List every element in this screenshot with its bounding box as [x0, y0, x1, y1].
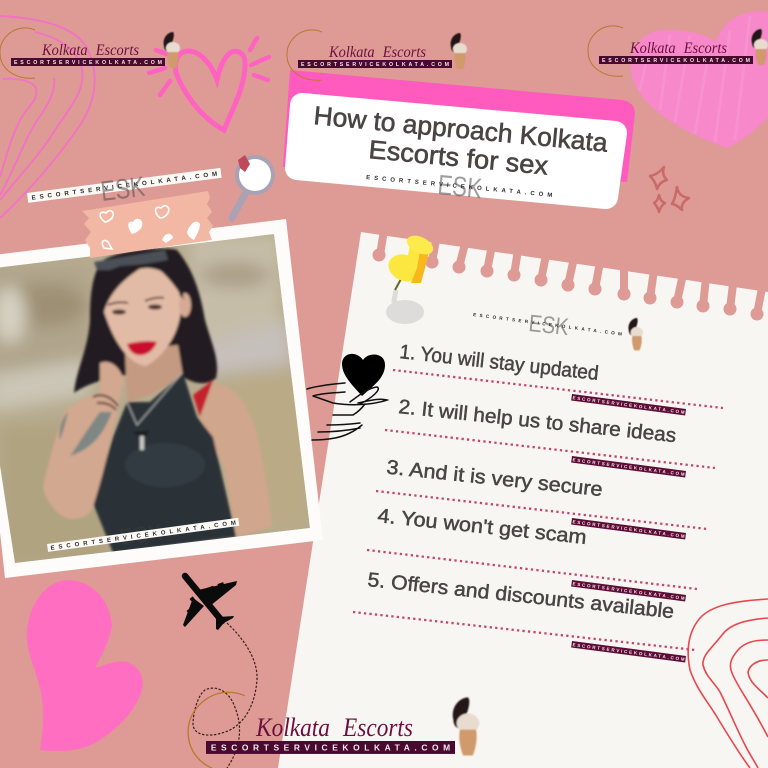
note watermark: ESK [527, 310, 570, 341]
photo backdrop [0, 234, 310, 563]
red lips [127, 341, 157, 355]
photo of woman [0, 234, 310, 565]
maroon url strip 3: ESCORTSERVICEKOLKATA.COM [572, 519, 685, 539]
white url ribbon: ESCORTSERVICEKOLKATA.COM [31, 171, 218, 202]
fringe hair [100, 262, 184, 312]
sunglasses [94, 250, 168, 270]
raised left arm [43, 362, 124, 519]
eyes and brows [108, 298, 164, 305]
pink outline heart with rays [149, 38, 269, 130]
maroon url strip 2: ESCORTSERVICEKOLKATA.COM [572, 457, 685, 477]
airplane icon [183, 576, 237, 630]
tape hearts [100, 206, 200, 249]
logo top centre [287, 30, 467, 80]
photo frame [0, 219, 323, 578]
maroon url strip 1: ESCORTSERVICEKOLKATA.COM [572, 395, 685, 415]
logo script: Kolkata Escorts [629, 40, 727, 57]
list item 1: 1. You will stay updated [398, 341, 600, 385]
title card [283, 70, 635, 204]
logo script: Kolkata Escorts [255, 713, 413, 742]
paper note [278, 230, 768, 768]
pink title backing [283, 70, 635, 182]
necklace and pendant [127, 373, 182, 425]
logo figure [164, 32, 180, 68]
logo bar: ESCORTSERVICEKOLKATA.COM [301, 62, 449, 68]
note watermark url: ESCORTSERVICEKOLKATA.COM [473, 312, 622, 337]
paper sheet [278, 232, 768, 768]
hand holding heart [307, 354, 387, 440]
logo bar: ESCORTSERVICEKOLKATA.COM [14, 60, 162, 66]
black top [93, 373, 236, 553]
red strap [193, 380, 213, 417]
bottom left pink heart [27, 580, 143, 751]
logo ring [0, 28, 35, 78]
title line two: Escorts for sex [367, 134, 549, 181]
logo top left [0, 28, 180, 78]
sparkles [650, 167, 689, 212]
title watermark url: ESCORTSERVICEKOLKATA.COM [366, 175, 553, 199]
face [102, 268, 181, 366]
note small figure [628, 318, 643, 350]
logo bottom large [188, 692, 479, 768]
maroon url strip 4: ESCORTSERVICEKOLKATA.COM [572, 581, 685, 601]
logo ring [588, 26, 623, 76]
logo ring [287, 30, 322, 80]
decorative pink swirl lines [0, 16, 95, 218]
list item 4: 4. You won't get scam [376, 505, 588, 549]
logo bar: ESCORTSERVICEKOLKATA.COM [211, 743, 450, 753]
logo figure [453, 697, 479, 756]
list item 3: 3. And it is very secure [385, 457, 604, 501]
list item 5: 5. Offers and discounts available [366, 569, 675, 623]
logo figure [752, 29, 768, 65]
logo script: Kolkata Escorts [328, 44, 426, 61]
hair [74, 249, 217, 393]
tape body [82, 191, 213, 258]
list item 2: 2. It will help us to share ideas [397, 396, 677, 447]
ribbon watermark: ESK [99, 171, 147, 207]
photo watermark: ESK [117, 519, 165, 550]
bracelets [93, 395, 118, 410]
torn notebook holes [373, 230, 763, 320]
logo top right [588, 26, 768, 76]
right ear [179, 293, 191, 317]
pink scribble heart [631, 11, 768, 148]
washi tape [82, 191, 213, 258]
title line one: How to approach Kolkata [312, 100, 609, 158]
white polaroid frame [0, 219, 323, 578]
dashed flight path [193, 623, 257, 768]
arm tattoo [59, 412, 112, 456]
dotted rule lines [353, 370, 723, 650]
logo script: Kolkata Escorts [41, 42, 139, 59]
red contour swirl [688, 599, 768, 768]
neck [125, 345, 183, 402]
right shoulder and arm [200, 383, 272, 537]
logo figure [451, 33, 467, 69]
logo bar: ESCORTSERVICEKOLKATA.COM [602, 58, 750, 64]
title watermark: ESK [436, 169, 483, 204]
maroon url strip 5: ESCORTSERVICEKOLKATA.COM [572, 642, 685, 662]
yellow push pin [384, 232, 436, 324]
white title panel [297, 105, 615, 197]
mirror icon [232, 155, 275, 218]
photo url strip: ESCORTSERVICEKOLKATA.COM [50, 520, 236, 552]
logo ring [188, 692, 245, 768]
